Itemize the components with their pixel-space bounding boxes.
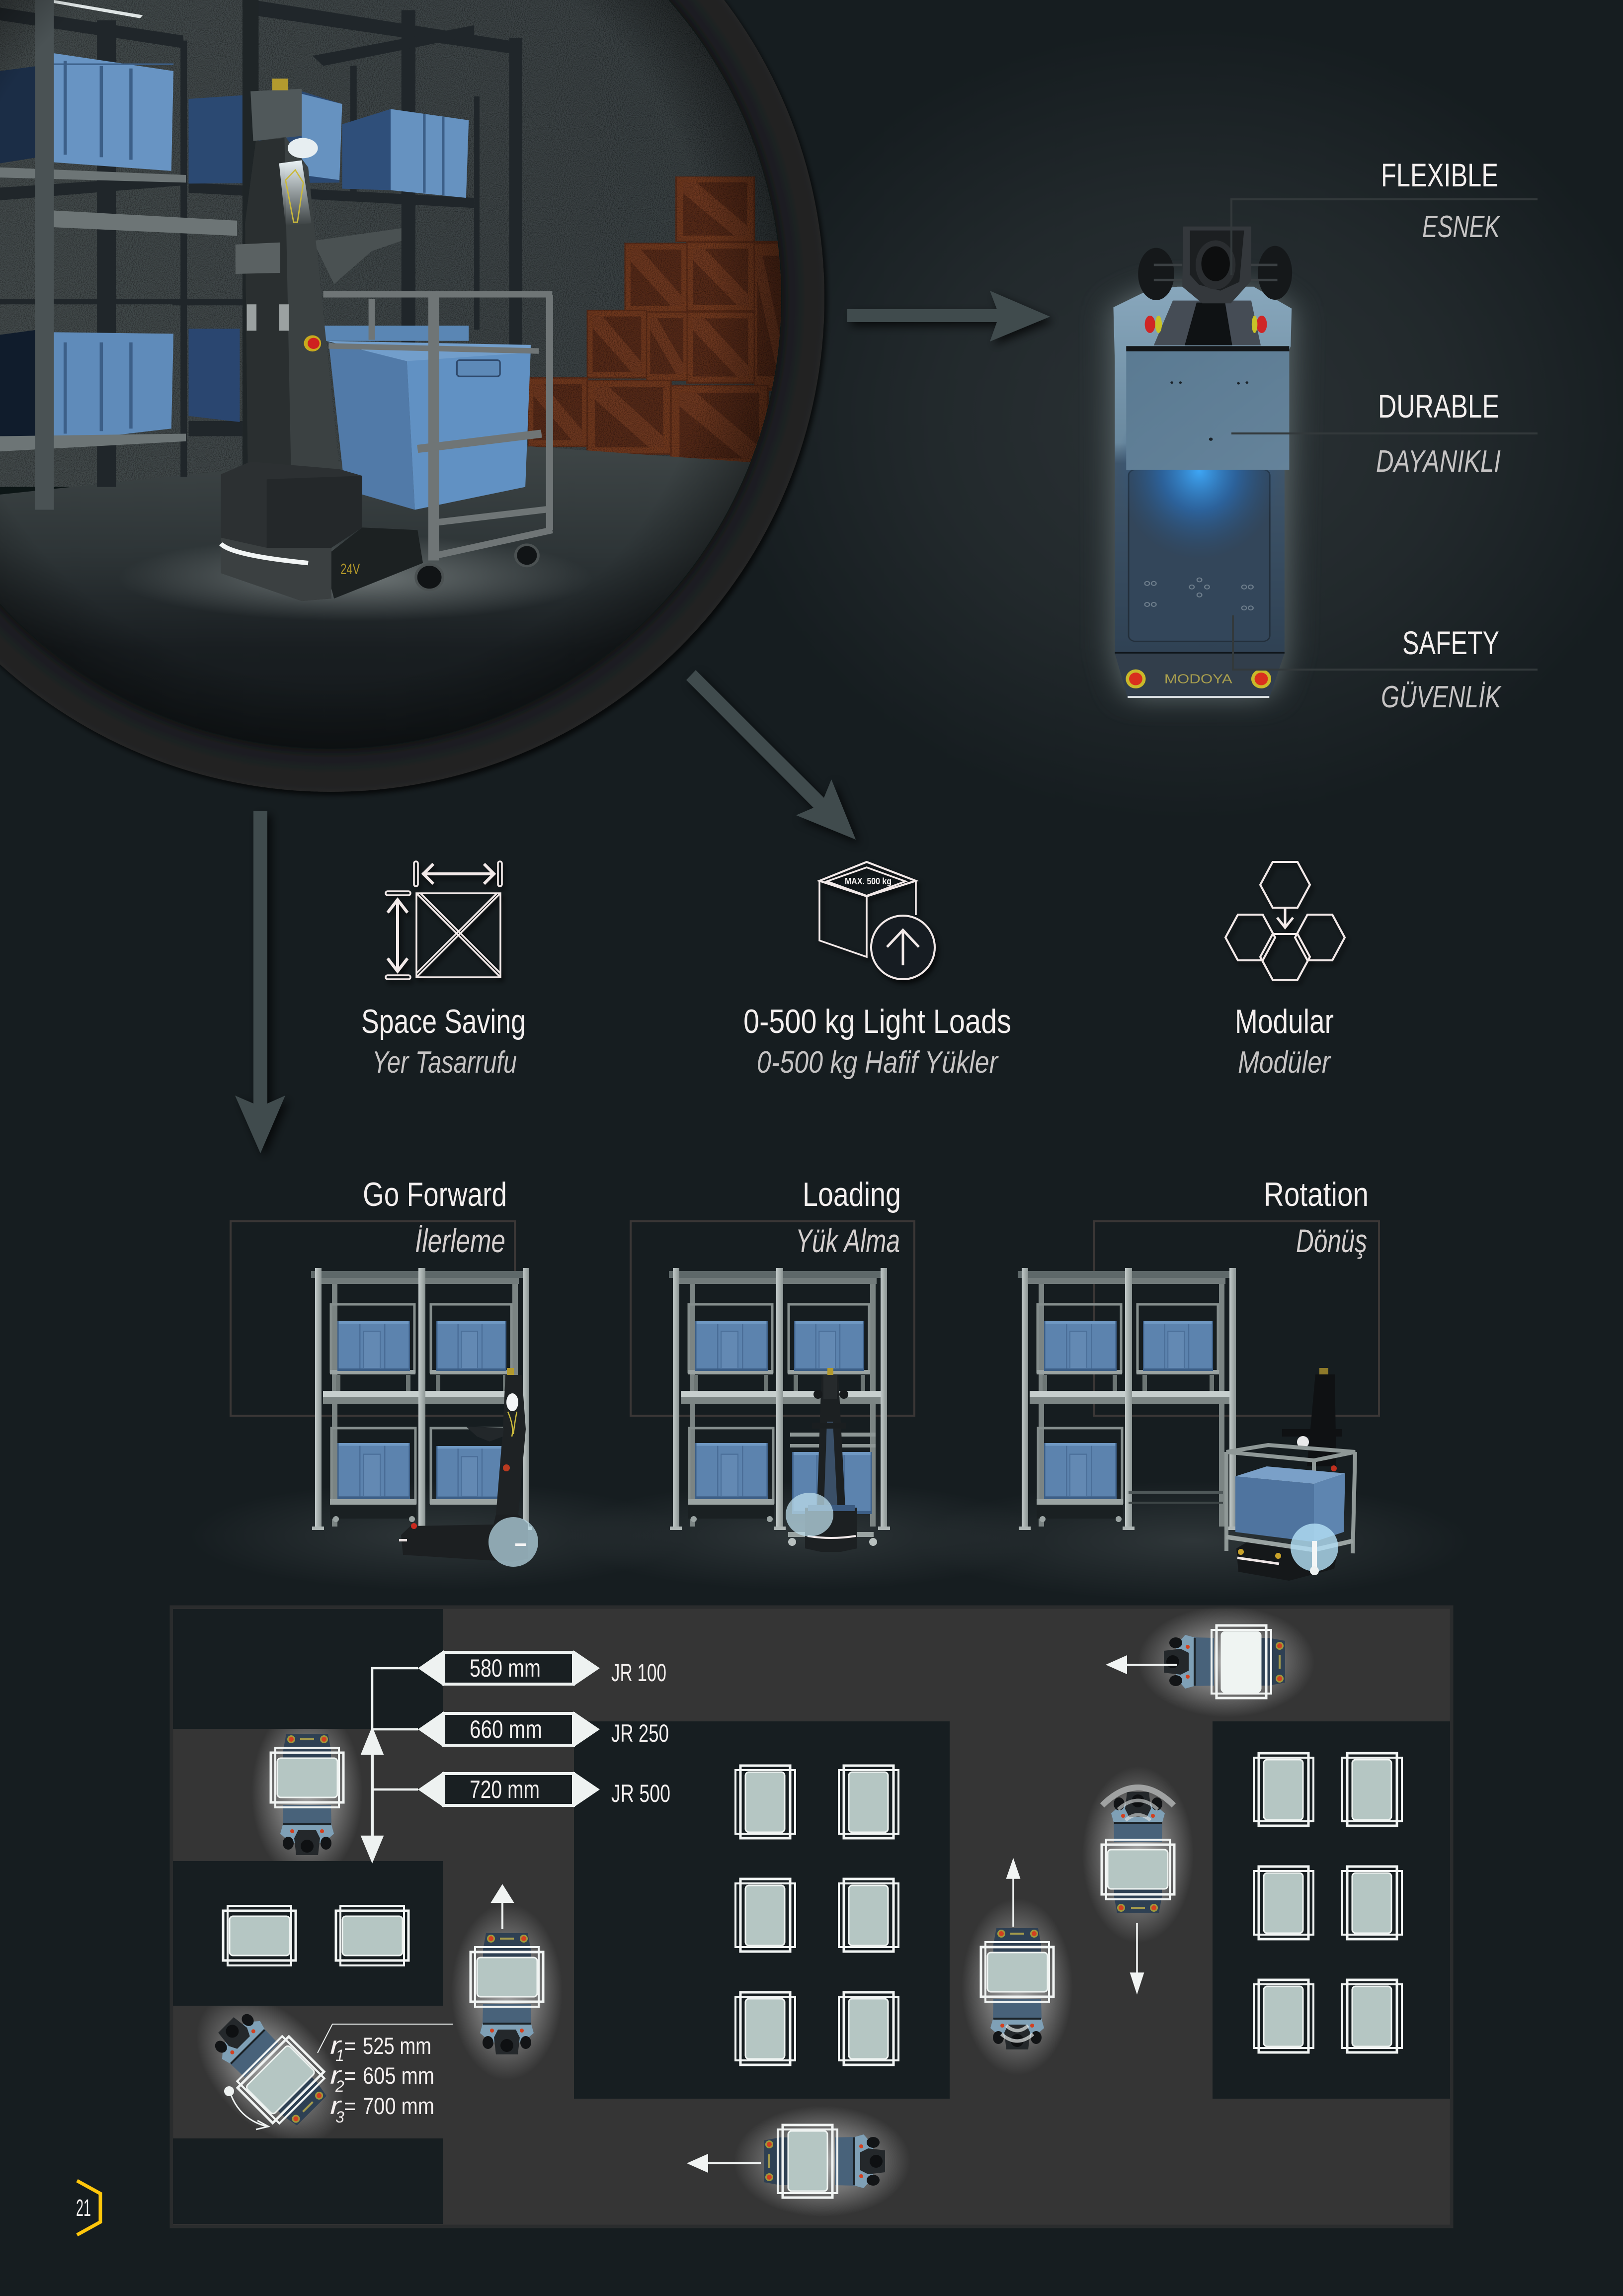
floor light under robot <box>119 535 593 621</box>
floor area <box>171 1607 1452 2226</box>
carts in right zone <box>1254 1753 1402 2052</box>
panel: rotation: Rotation <box>1264 1176 1369 1213</box>
front view robot <box>786 1368 877 1552</box>
callout: flexible: FLEXIBLE <box>1381 157 1498 193</box>
side wheels <box>1138 246 1292 300</box>
centre column <box>1154 301 1261 345</box>
dimension: JR 250 <box>418 1711 669 1747</box>
turning radius values: r <box>330 2061 342 2089</box>
shelf with bins <box>1018 1268 1239 1530</box>
top view robot <box>1113 227 1292 698</box>
wooden crates <box>528 176 787 466</box>
panel: loading: Loading <box>803 1176 901 1213</box>
turning radius values: 1 <box>335 2046 344 2064</box>
robot: up in centre aisle <box>981 1928 1054 2049</box>
storage racks <box>0 0 522 510</box>
arrow: to loads icon <box>686 670 856 840</box>
icon: box with lift arrow: MAX. 500 kg <box>845 876 892 886</box>
arrow: bottom aisle left <box>689 2155 761 2171</box>
arrow: centre down <box>1131 1923 1143 1992</box>
dimension: JR 500: JR 500 <box>611 1780 670 1807</box>
feature: modular: Modüler <box>1238 1045 1331 1080</box>
turning radius values: r <box>330 2032 342 2059</box>
turning radius values: 3 <box>335 2108 344 2126</box>
arrow: top aisle left <box>1108 1657 1177 1673</box>
dimension: JR 500 <box>418 1772 670 1807</box>
feature: light loads <box>743 862 1011 1080</box>
side view robot <box>399 1368 538 1567</box>
panel: go forward: İlerleme <box>415 1222 505 1259</box>
edge shading <box>0 0 781 749</box>
icon: hexagons <box>1225 862 1345 980</box>
wall <box>0 0 845 487</box>
floor <box>0 446 750 716</box>
arrow: centre up <box>1007 1861 1019 1927</box>
cart with blue bin <box>324 292 552 590</box>
feature: space saving: Yer Tasarrufu <box>372 1045 517 1080</box>
bumper <box>1115 652 1285 698</box>
robot: top aisle heading left <box>1164 1625 1285 1698</box>
callout: durable: DAYANIKLI <box>1376 444 1501 479</box>
panel: loading <box>631 1176 914 1552</box>
icon: space saving <box>386 861 502 979</box>
feature: light loads: 0-500 kg Light Loads <box>743 1003 1011 1040</box>
feature: space saving <box>361 861 526 1080</box>
panel: rotation: Dönüş <box>1296 1222 1367 1259</box>
turning radius values <box>318 2024 453 2126</box>
storage zones <box>173 1609 1450 2224</box>
feature: modular <box>1225 862 1345 1080</box>
page number <box>76 2181 100 2235</box>
robot base <box>221 462 423 601</box>
photo content <box>0 0 781 698</box>
outline box <box>1094 1221 1379 1416</box>
robot: down in centre aisle <box>1102 1787 1174 1913</box>
turning radius values: 2 <box>335 2077 344 2095</box>
dimension: JR 250: JR 250 <box>611 1719 669 1747</box>
feature: light loads: 0-500 kg Hafif Yükler <box>757 1045 999 1080</box>
callout: flexible: ESNEK <box>1422 210 1501 244</box>
outline box <box>231 1221 515 1416</box>
floor glow under operation modes <box>189 1481 1471 1601</box>
robot glow <box>1113 287 1292 697</box>
circular photo: warehouse robot scene <box>0 0 845 795</box>
arrow: robot up <box>492 1886 512 1929</box>
robot halos on floor <box>168 1606 1315 2217</box>
aisle width arrow and leaders <box>362 1668 418 1861</box>
dimension: JR 250: 660 mm <box>470 1715 542 1743</box>
head unit <box>1182 227 1251 303</box>
robot carrying cart <box>1226 1368 1355 1581</box>
robot base: 24V <box>340 560 360 578</box>
callout: safety <box>1233 615 1538 714</box>
callout: durable <box>1231 388 1538 479</box>
callout: flexible <box>1231 157 1538 275</box>
background glow behind top robot <box>721 25 1623 820</box>
robot: aisle width reference <box>271 1734 343 1855</box>
dimension: JR 100: 580 mm <box>470 1654 541 1682</box>
floor plan <box>168 1606 1452 2226</box>
panel: rotation <box>1018 1176 1379 1581</box>
blue bins on rack <box>0 66 38 164</box>
circular ring frame <box>0 0 824 792</box>
panel: go forward <box>231 1176 538 1567</box>
carts in left zone <box>223 1906 408 1965</box>
carts in centre zone <box>735 1766 898 2065</box>
feature: modular: Modular <box>1235 1003 1334 1040</box>
dimension: JR 100 <box>418 1650 666 1687</box>
icon: box with lift arrow <box>819 862 935 979</box>
turning radius values: r <box>330 2092 342 2120</box>
panel: loading: Yük Alma <box>796 1222 900 1259</box>
arrow: to top robot <box>847 291 1050 341</box>
feature: space saving: Space Saving <box>361 1003 526 1040</box>
robot: bottom aisle heading left <box>764 2125 885 2198</box>
inner panel with blue light <box>1116 382 1282 641</box>
load plate <box>1126 346 1289 470</box>
bumper: MODOYA <box>1164 672 1232 686</box>
callout: safety: SAFETY <box>1402 624 1499 661</box>
turning radius values: 525 mm <box>363 2033 431 2059</box>
callout: safety: GÜVENLİK <box>1381 680 1502 714</box>
mounting holes <box>1145 578 1253 610</box>
panel: go forward: Go Forward <box>363 1176 507 1213</box>
turning radius values: = <box>344 2033 356 2059</box>
turning radius values: = <box>344 2093 356 2119</box>
dimension: JR 100: JR 100 <box>611 1659 666 1687</box>
arrow: down to operation modes <box>235 811 285 1153</box>
dimension: JR 500: 720 mm <box>470 1776 540 1803</box>
turning radius values: 700 mm <box>363 2093 434 2119</box>
outline box <box>631 1221 914 1416</box>
turning radius values: 605 mm <box>363 2062 434 2089</box>
page number: 21 <box>76 2195 91 2221</box>
turning radius values: = <box>344 2063 356 2089</box>
robot: heading up <box>471 1933 543 2054</box>
shelf with bins <box>669 1268 890 1530</box>
robot mast <box>236 79 339 469</box>
emergency stops <box>1145 316 1267 333</box>
chassis <box>1113 287 1292 697</box>
callout: durable: DURABLE <box>1378 388 1499 425</box>
shelf with bins <box>311 1268 532 1530</box>
rotation arrow <box>224 2086 268 2129</box>
robot: rotating <box>200 1999 337 2136</box>
